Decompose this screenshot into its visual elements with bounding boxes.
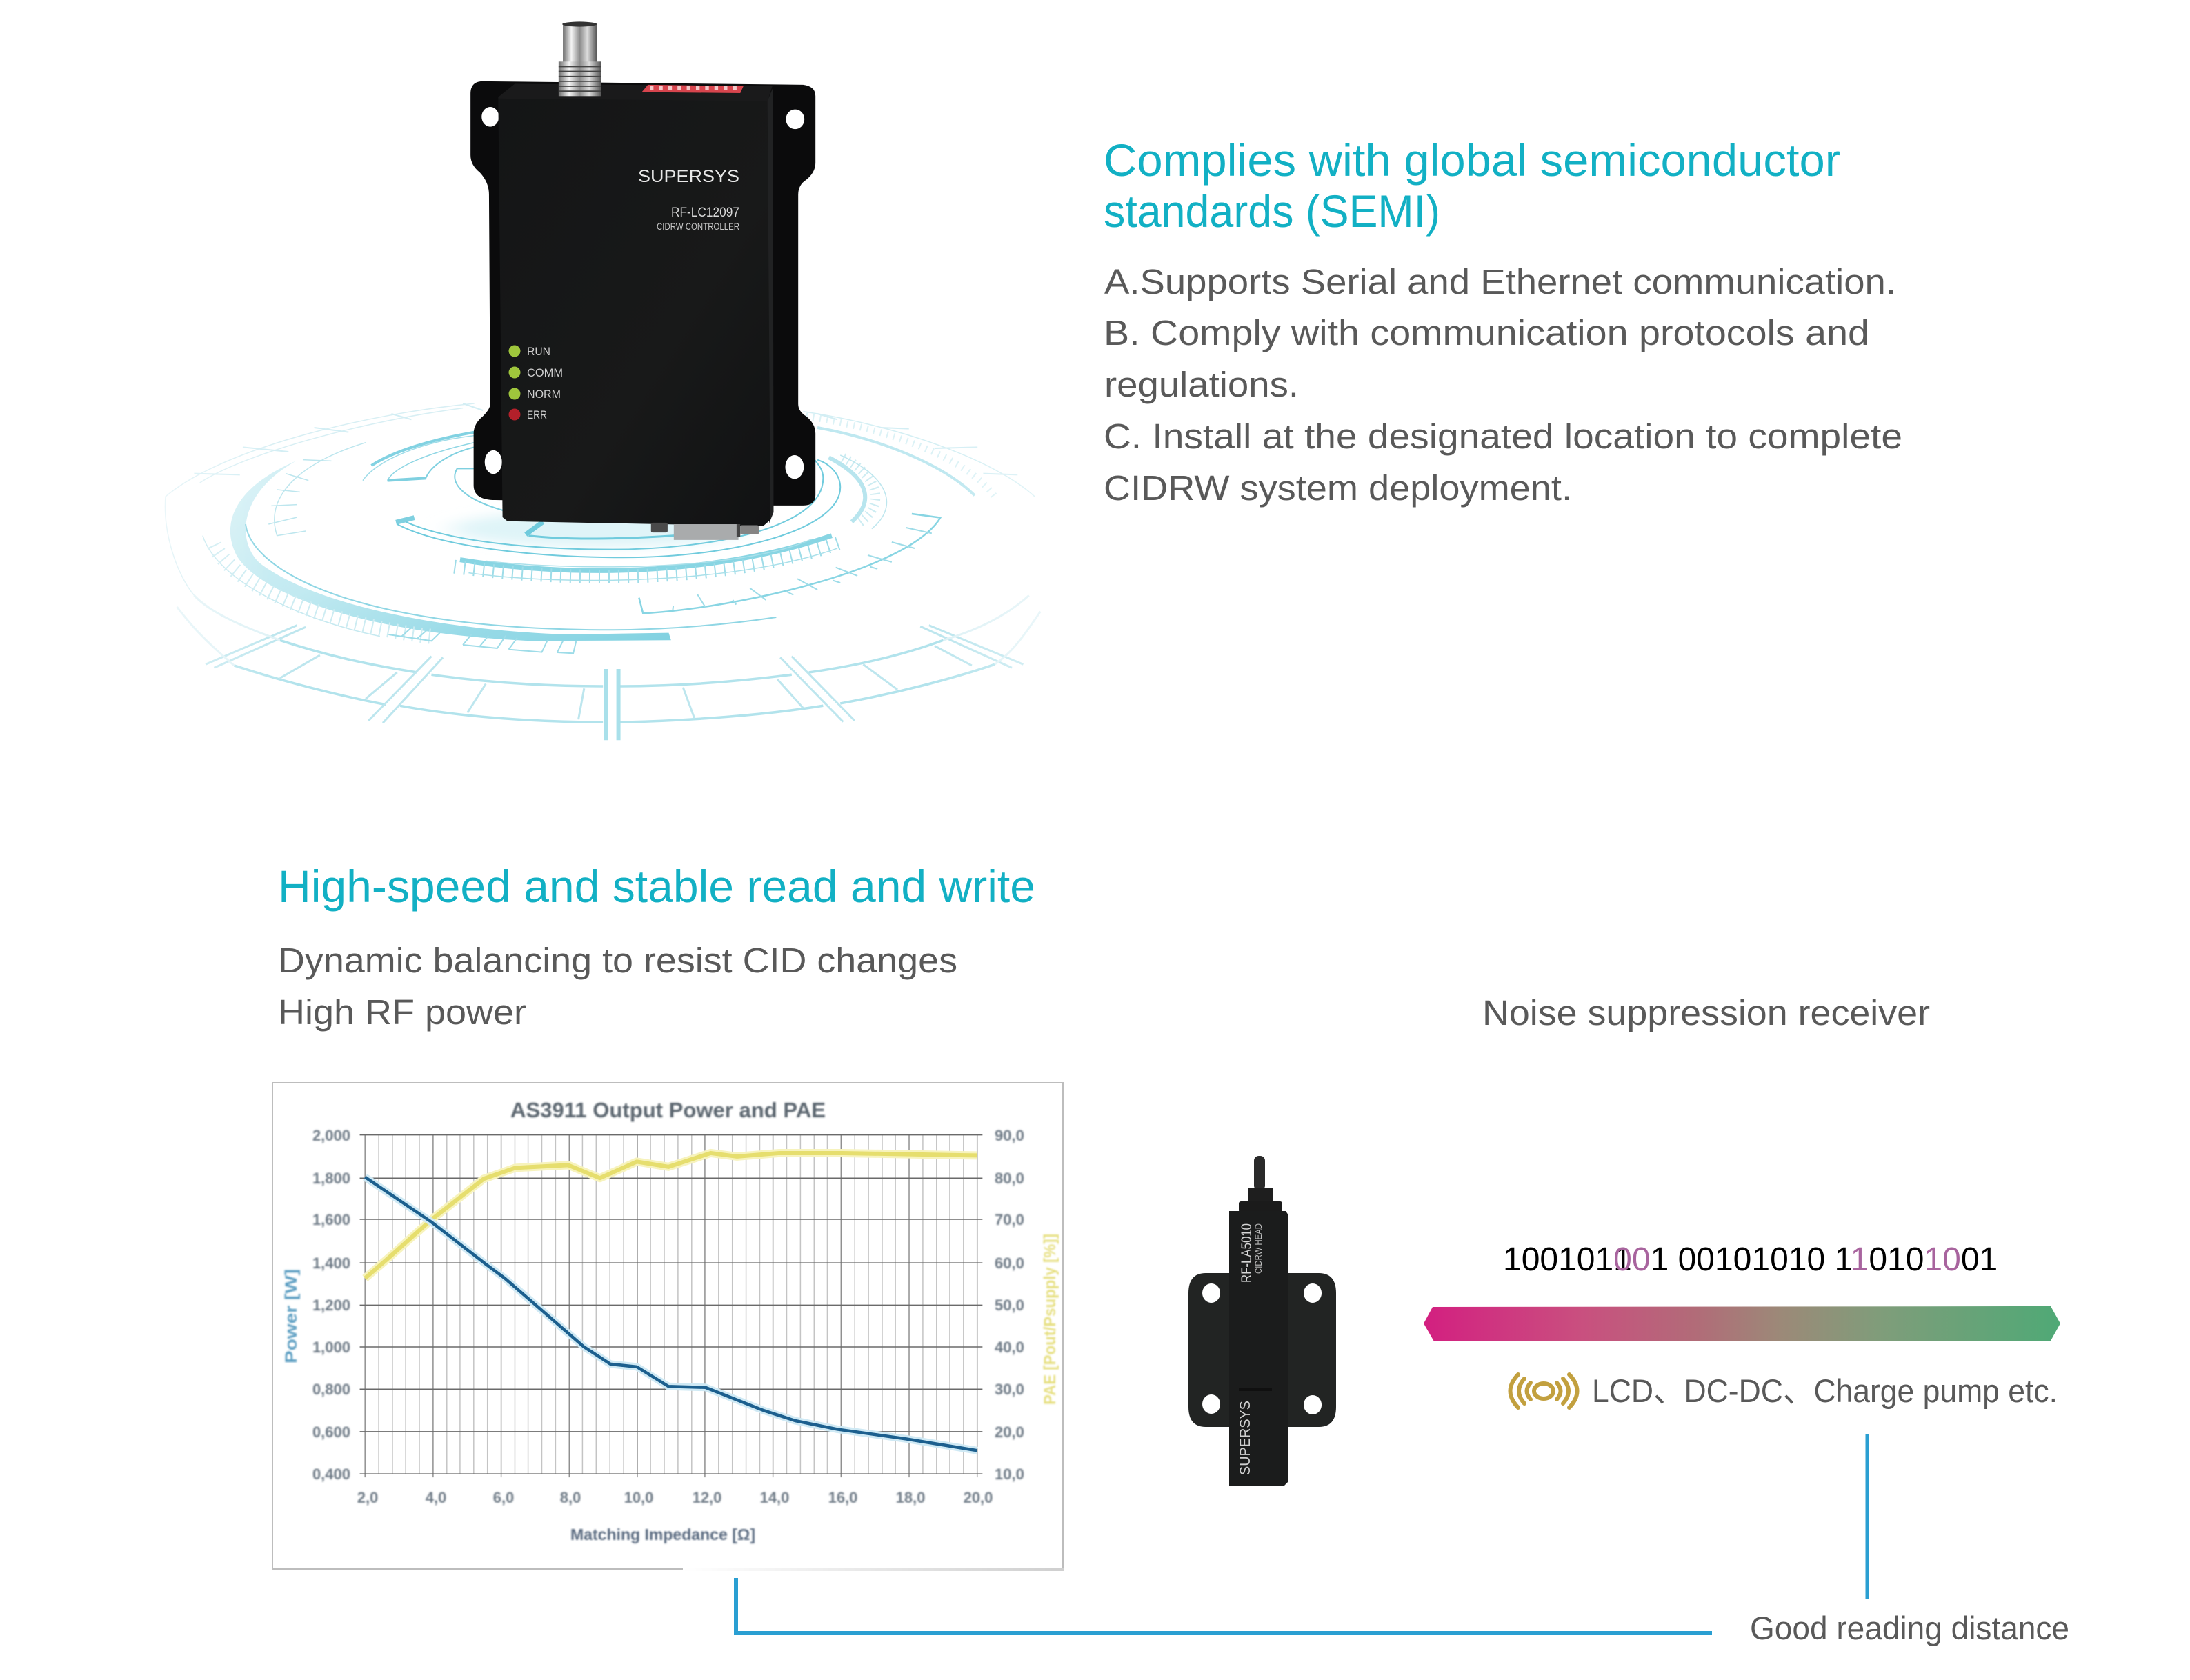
mounting flange bbox=[470, 81, 815, 506]
connector: noise to reading distance bbox=[1865, 1434, 1869, 1599]
right axis labels: 40,0 bbox=[995, 1339, 1024, 1356]
device model: RF-LC12097 bbox=[671, 206, 739, 220]
power curve (blue) bbox=[365, 1177, 977, 1450]
left axis labels: 1,600 bbox=[312, 1211, 350, 1228]
head logo: SUPERSYS bbox=[1237, 1401, 1253, 1475]
right axis labels: 90,0 bbox=[995, 1127, 1024, 1144]
left axis labels: 0,800 bbox=[312, 1381, 350, 1398]
binary data stream: 100101001 00101010 110101001 bbox=[1503, 1241, 1998, 1278]
left axis labels: 1,000 bbox=[312, 1339, 350, 1356]
status LEDs: NORM bbox=[527, 388, 561, 401]
bottom axis labels: 12,0 bbox=[693, 1489, 721, 1506]
device caption: CIDRW CONTROLLER bbox=[657, 221, 739, 232]
heading: SEMI standards: standards (SEMI) bbox=[1104, 186, 1440, 237]
bottom axis labels: 10,0 bbox=[624, 1489, 653, 1506]
bottom axis labels: 2,0 bbox=[357, 1489, 378, 1506]
right axis labels: 80,0 bbox=[995, 1170, 1024, 1187]
chart title: AS3911 Output Power and PAE bbox=[510, 1098, 826, 1122]
status LEDs: COMM bbox=[527, 366, 563, 379]
text block: RF features bbox=[278, 941, 957, 1032]
head connector pin bbox=[1239, 1156, 1282, 1212]
bottom axis labels: 18,0 bbox=[896, 1489, 925, 1506]
connector: chart to reading distance bbox=[736, 1578, 1712, 1633]
bottom axis labels bbox=[357, 1489, 993, 1506]
head plate bbox=[1188, 1273, 1336, 1427]
text: good reading distance: Good reading distance bbox=[1750, 1610, 2069, 1646]
bottom axis labels: 6,0 bbox=[493, 1489, 514, 1506]
device front face bbox=[498, 99, 770, 526]
icon: interference waves bbox=[1511, 1374, 1577, 1408]
icon: CIDRW head bbox=[1188, 1156, 1336, 1486]
bottom axis labels: 14,0 bbox=[760, 1489, 789, 1506]
heading: SEMI standards bbox=[1104, 134, 1840, 237]
bottom axis labels: 8,0 bbox=[560, 1489, 581, 1506]
DIP switch bbox=[641, 85, 744, 93]
device top face bbox=[498, 83, 773, 101]
bottom axis labels: 16,0 bbox=[828, 1489, 857, 1506]
left axis labels: 0,600 bbox=[312, 1423, 350, 1441]
text block: RF features: Dynamic balancing to resist CID changes bbox=[278, 941, 957, 980]
serial connector bbox=[651, 523, 759, 540]
text: noise sources: LCD、DC-DC、Charge pump etc. bbox=[1592, 1372, 2058, 1409]
left axis labels bbox=[312, 1127, 350, 1483]
decorative holographic rings under device bbox=[165, 403, 1040, 740]
text block: SEMI feature list: regulations. bbox=[1104, 365, 1299, 404]
right axis labels: 30,0 bbox=[995, 1381, 1024, 1398]
signal gradient bar bbox=[1424, 1306, 2060, 1341]
status LEDs bbox=[509, 345, 563, 421]
left axis labels: 1,800 bbox=[312, 1170, 350, 1187]
text block: SEMI feature list bbox=[1104, 262, 1902, 508]
head caption text: CIDRW HEAD bbox=[1253, 1223, 1264, 1274]
bottom axis labels: 4,0 bbox=[426, 1489, 446, 1506]
left axis labels: 1,200 bbox=[312, 1297, 350, 1314]
device side face bbox=[768, 88, 773, 523]
right axis labels bbox=[995, 1127, 1024, 1483]
right axis labels: 10,0 bbox=[995, 1466, 1024, 1483]
text block: SEMI feature list: A.Supports Serial and Ethernet communication. bbox=[1104, 262, 1896, 301]
left axis labels: 2,000 bbox=[312, 1127, 350, 1144]
status LEDs: RUN bbox=[527, 345, 550, 358]
bottom axis labels: 20,0 bbox=[964, 1489, 993, 1506]
right axis title: PAE [Pout/Psupply [%]] bbox=[1041, 1234, 1059, 1405]
chart frame bbox=[272, 1083, 1064, 1571]
status LEDs: ERR bbox=[527, 408, 547, 421]
chart: AS3911 output power and PAE bbox=[272, 1083, 1064, 1571]
left axis labels: 1,400 bbox=[312, 1254, 350, 1272]
heading: SEMI standards: Complies with global semiconductor bbox=[1104, 134, 1840, 186]
heading: high-speed read and write: High-speed and stable read and write bbox=[278, 861, 1035, 912]
right axis labels: 20,0 bbox=[995, 1423, 1024, 1441]
head body bbox=[1229, 1211, 1288, 1486]
text block: SEMI feature list: C. Install at the designated location to complete bbox=[1104, 417, 1902, 456]
text block: SEMI feature list: CIDRW system deployment. bbox=[1104, 468, 1572, 508]
right axis labels: 60,0 bbox=[995, 1254, 1024, 1272]
right axis labels: 70,0 bbox=[995, 1211, 1024, 1228]
text block: RF features: High RF power bbox=[278, 992, 526, 1032]
icon: controller device bbox=[470, 21, 815, 540]
device logo: SUPERSYS bbox=[638, 167, 739, 186]
chart grid bbox=[360, 1135, 982, 1477]
left axis labels: 0,400 bbox=[312, 1466, 350, 1483]
binary data stream: 1 bbox=[1613, 1241, 1632, 1278]
text block: SEMI feature list: B. Comply with communication protocols and bbox=[1104, 313, 1869, 352]
x axis title: Matching Impedance [Ω] bbox=[570, 1526, 755, 1543]
metal antenna connector bbox=[559, 21, 601, 96]
text: noise suppression label: Noise suppression receiver bbox=[1482, 993, 1930, 1032]
head model text: RF-LA5010 bbox=[1239, 1223, 1255, 1283]
panel: controller product visual bbox=[165, 21, 1040, 740]
right axis labels: 50,0 bbox=[995, 1297, 1024, 1314]
left axis title: Power [W] bbox=[282, 1269, 301, 1363]
PAE curve (yellow) bbox=[365, 1153, 977, 1279]
